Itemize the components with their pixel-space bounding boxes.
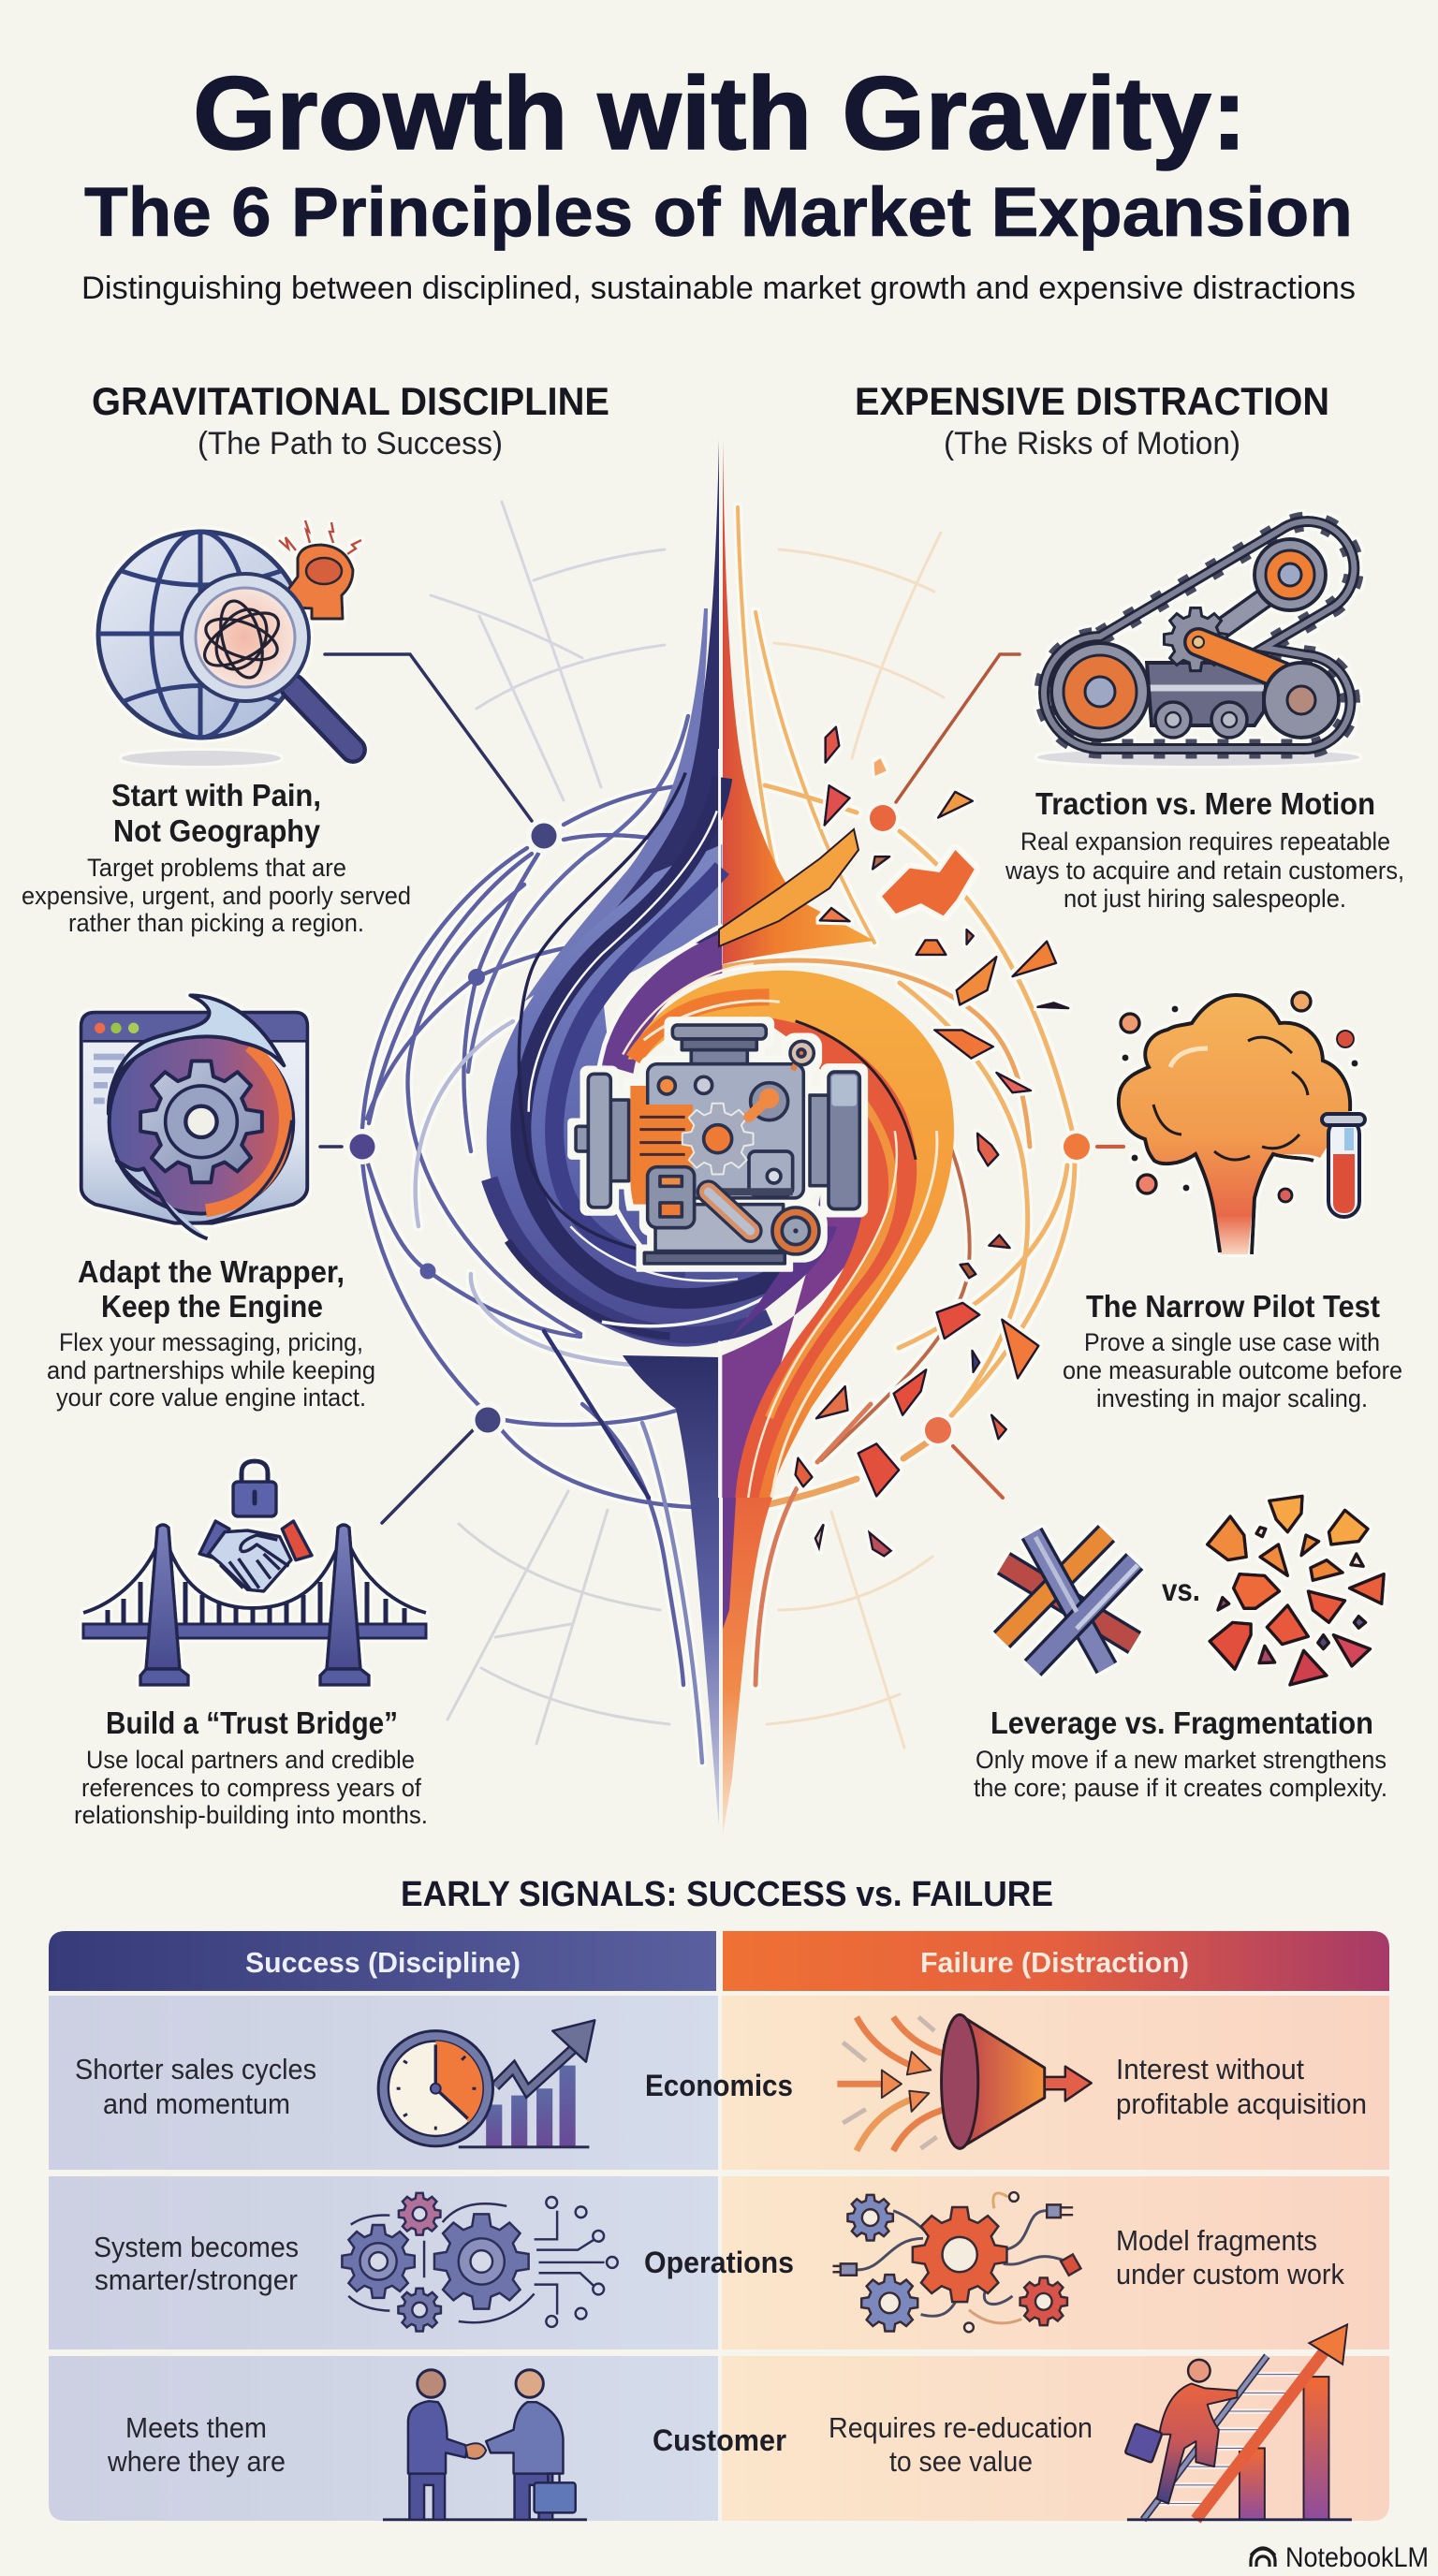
text: Leverage: Only move if a new market strengthens (976, 1746, 1387, 1774)
text: Narrow Pilot: The Narrow Pilot Test (1086, 1289, 1380, 1324)
left column heading (92, 379, 609, 461)
right column heading: EXPENSIVE DISTRACTION (855, 379, 1329, 423)
text: Adapt the Wrapper: Flex your messaging, pricing, (59, 1328, 363, 1356)
row: economics: profitable acquisition (1116, 2087, 1367, 2120)
row: economics: and momentum (103, 2087, 290, 2120)
panel: Leverage vs Fragmentation (974, 1496, 1387, 1802)
row backgrounds (49, 1996, 1389, 2521)
text: Start with Pain: Not Geography (113, 813, 321, 848)
text: Traction: ways to acquire and retain customers, (1005, 856, 1404, 885)
upper spines (524, 440, 874, 1835)
panel: Trust Bridge (74, 1461, 428, 1829)
icon: mushroom cloud with test tube (1119, 992, 1365, 1254)
icon: browser window with gear (81, 995, 307, 1238)
row: customer: where they are (107, 2445, 286, 2478)
tagline: Distinguishing between disciplined, sustainable market growth and expensive distractions (81, 271, 1356, 306)
text: Traction (1005, 786, 1404, 913)
icon: two people shaking hands (383, 2370, 587, 2520)
icon: shattered fragments (1208, 1496, 1384, 1685)
icon: tangled gear with cables (832, 2192, 1080, 2332)
heading: early signals: EARLY SIGNALS: SUCCESS vs. FAILURE (401, 1875, 1053, 1914)
text: Trust Bridge: Build a “Trust Bridge” (106, 1705, 398, 1740)
swirl blades (487, 749, 954, 1498)
comparison table (49, 1931, 1389, 2521)
subtitle: The 6 Principles of Market Expansion (84, 173, 1353, 251)
failure column header: Failure (Distraction) (920, 1946, 1189, 1979)
text: Trust Bridge: Use local partners and credible (86, 1746, 415, 1774)
row: economics: Economics (645, 2069, 793, 2102)
icon: tracked vehicle (1037, 521, 1359, 766)
text: Adapt the Wrapper: Adapt the Wrapper, (78, 1254, 345, 1289)
text: Start with Pain: Start with Pain, (111, 778, 321, 812)
icon: climber on ladder with rising arrow (1125, 2324, 1352, 2520)
icon: bridge with lock and handshake (83, 1461, 426, 1685)
text: Leverage: Leverage vs. Fragmentation (990, 1705, 1373, 1740)
text: Narrow Pilot (1063, 1289, 1402, 1412)
icon: woven bars (1002, 1533, 1137, 1668)
panel: Adapt the Wrapper (47, 995, 375, 1412)
icon: globe with magnifier and head (98, 520, 361, 766)
debris fragments lower (796, 1134, 1038, 1556)
text: Start with Pain (22, 778, 411, 937)
icon: clock and growth chart (378, 2020, 594, 2147)
panel: Traction vs Mere Motion (1005, 521, 1404, 913)
row: operations: Model fragments (1116, 2224, 1317, 2257)
row: operations: under custom work (1116, 2258, 1344, 2291)
row: customer (107, 2324, 1352, 2520)
text: Narrow Pilot: investing in major scaling. (1096, 1384, 1368, 1412)
text: Adapt the Wrapper (47, 1254, 375, 1412)
text: Leverage: the core; pause if it creates complexity. (974, 1774, 1387, 1802)
text: Adapt the Wrapper: and partnerships while keeping (47, 1356, 375, 1384)
text: Start with Pain: Target problems that are (87, 854, 346, 882)
text: Trust Bridge (74, 1705, 428, 1829)
label: vs.: vs. (1162, 1573, 1200, 1607)
row: customer: Meets them (125, 2411, 267, 2444)
left column heading: GRAVITATIONAL DISCIPLINE (92, 379, 609, 423)
right network arcs (723, 507, 1075, 1685)
faint web lines (431, 502, 944, 1748)
row: customer: Customer (653, 2423, 786, 2457)
text: Trust Bridge: relationship-building into months. (74, 1801, 428, 1829)
left navy vortex (487, 773, 811, 1347)
row: economics (75, 2014, 1367, 2151)
success column header: Success (Discipline) (245, 1946, 521, 1979)
central gravity diagram (320, 440, 1123, 1835)
row: operations: Operations (644, 2246, 794, 2279)
row: economics: Interest without (1116, 2053, 1304, 2086)
panel: Narrow Pilot Test (1063, 992, 1402, 1412)
icon: funnel (837, 2014, 1092, 2151)
panel: Start with Pain (22, 520, 411, 937)
success column header (49, 1931, 716, 1991)
text: Narrow Pilot: one measurable outcome before (1063, 1356, 1402, 1384)
failure column header (723, 1931, 1389, 1991)
text: Trust Bridge: references to compress years of (81, 1774, 421, 1802)
icon: interlocking gears and circuit (342, 2193, 618, 2332)
text: Narrow Pilot: Prove a single use case with (1084, 1328, 1380, 1356)
right column heading (855, 379, 1329, 461)
white S divider (594, 926, 722, 1251)
top swoosh (719, 829, 858, 946)
row: operations: System becomes (94, 2231, 299, 2263)
left network arcs (362, 716, 702, 1763)
row: customer: to see value (889, 2445, 1033, 2478)
row: customer: Requires re-education (829, 2411, 1093, 2444)
text: Start with Pain: expensive, urgent, and poorly served (22, 882, 411, 910)
text: Traction: Real expansion requires repeatable (1020, 827, 1390, 856)
text: Traction: Traction vs. Mere Motion (1035, 786, 1375, 821)
icon: central engine (576, 1025, 859, 1264)
text: Start with Pain: rather than picking a region. (68, 909, 364, 937)
debris fragments upper (820, 727, 1068, 1092)
text: Traction: not just hiring salespeople. (1064, 885, 1346, 913)
right orange vortex (602, 932, 954, 1498)
row: economics: Shorter sales cycles (75, 2053, 316, 2086)
title: Growth with Gravity: (193, 56, 1247, 171)
text: Adapt the Wrapper: Keep the Engine (101, 1289, 323, 1324)
text: Leverage (974, 1705, 1387, 1802)
connectors and nodes (320, 654, 1123, 1523)
row: operations (94, 2192, 1344, 2332)
row: operations: smarter/stronger (95, 2263, 298, 2296)
left column heading: (The Path to Success) (198, 426, 503, 461)
text: Adapt the Wrapper: your core value engine intact. (56, 1383, 366, 1412)
right column heading: (The Risks of Motion) (944, 426, 1240, 461)
